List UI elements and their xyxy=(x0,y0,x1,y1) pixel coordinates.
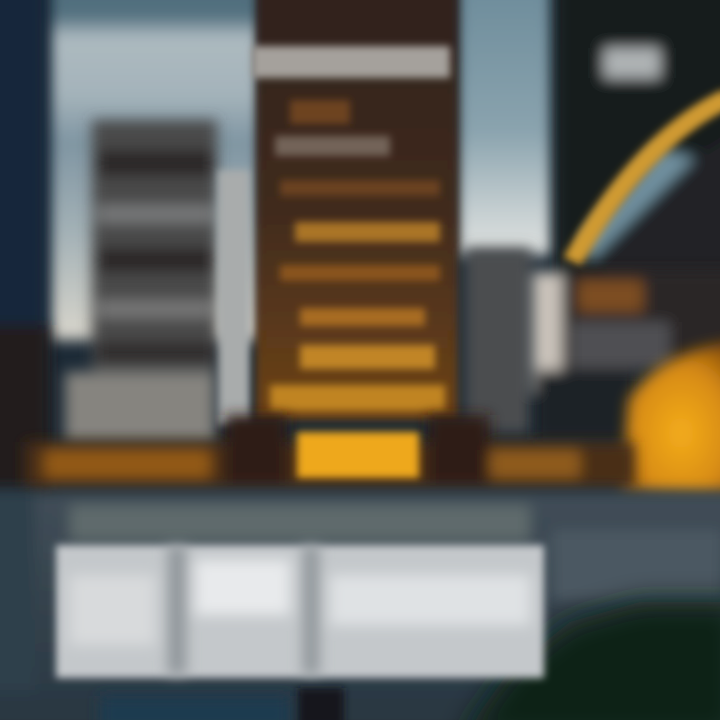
tower top light band xyxy=(252,46,450,78)
right mid building xyxy=(532,270,720,440)
pale column xyxy=(218,170,250,425)
panel columns xyxy=(70,545,530,675)
right amber glow xyxy=(622,340,720,495)
dark green foliage xyxy=(460,602,720,720)
central yellow entrance xyxy=(297,432,419,478)
far left dark tower xyxy=(0,0,50,490)
right dark tower xyxy=(556,0,720,290)
bottom blue strip xyxy=(100,696,290,720)
lower ground xyxy=(0,490,720,720)
tower window rows xyxy=(270,100,445,411)
right sky xyxy=(458,0,552,255)
bottom dark figure xyxy=(298,688,344,720)
golden arc xyxy=(572,98,720,262)
white panel xyxy=(56,545,544,678)
central tower xyxy=(252,0,458,420)
left sky xyxy=(50,0,260,340)
left grey building xyxy=(65,120,217,442)
right grey building xyxy=(465,248,531,433)
street band xyxy=(25,415,635,488)
